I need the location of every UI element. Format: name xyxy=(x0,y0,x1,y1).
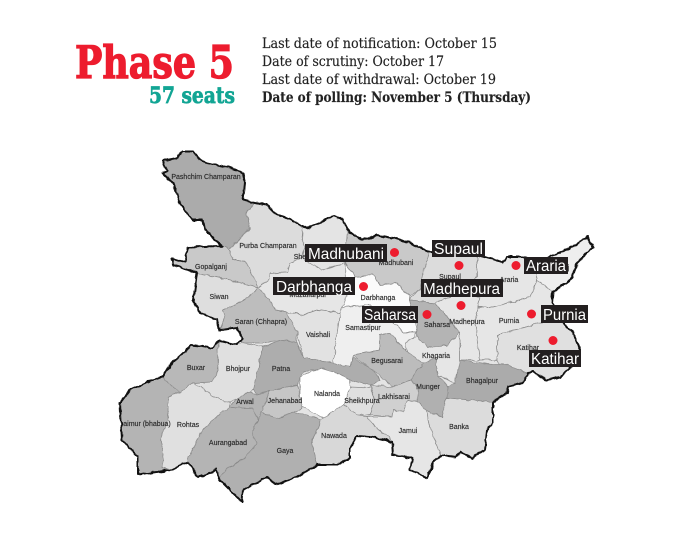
district: Gaya xyxy=(218,412,320,502)
district: Purnia xyxy=(475,280,560,360)
subtitle: 57 seats: 57 seats xyxy=(149,83,235,109)
district: Buxar xyxy=(163,341,220,392)
district: Jamui xyxy=(367,400,442,478)
text block: election schedule: Date of polling: November 5 (Thursday) xyxy=(262,90,531,106)
district: Gopalganj xyxy=(172,246,258,288)
text block: election schedule: Date of scrutiny: October 17 xyxy=(262,54,444,70)
district: Lakhisarai xyxy=(370,380,418,417)
district name labels: Nalanda xyxy=(314,391,340,398)
district name labels: Gaya xyxy=(277,448,293,455)
district name labels: Bhagalpur xyxy=(466,378,499,385)
district: Banka xyxy=(427,398,493,458)
marker: Supaul: Supaul xyxy=(434,241,483,258)
district: Munger xyxy=(410,358,448,417)
map outline: state border xyxy=(120,152,593,502)
district: Rohtas xyxy=(160,383,230,470)
district name labels: Purba Champaran xyxy=(239,243,297,250)
district name labels: Madhubani xyxy=(379,260,414,267)
district name labels: Darbhanga xyxy=(361,295,395,302)
district: Patna xyxy=(253,340,380,395)
district name labels: Aurangabad xyxy=(209,440,247,447)
district name labels: aimur (bhabua) xyxy=(123,421,171,428)
district: Araria xyxy=(460,255,537,307)
marker: Araria xyxy=(512,257,568,275)
marker: Purnia xyxy=(527,305,588,324)
district name labels: Jamui xyxy=(399,428,418,435)
district name labels: Madhepura xyxy=(449,319,485,326)
district: Nalanda xyxy=(300,368,350,418)
district name labels: Munger xyxy=(416,384,441,391)
district name labels: Saharsa xyxy=(424,322,450,329)
district: Khagaria xyxy=(405,333,460,383)
district: Jehanabad xyxy=(260,385,302,418)
marker: Katihar xyxy=(529,336,581,368)
district: Nawada xyxy=(312,405,392,465)
district: Katihar xyxy=(497,317,580,380)
district: Aurangabad xyxy=(188,407,258,478)
district: Saharsa xyxy=(410,300,460,347)
district: Madhepura xyxy=(435,293,480,360)
district name labels: Lakhisarai xyxy=(378,394,410,401)
district name labels: Khagaria xyxy=(422,353,450,360)
marker: Supaul xyxy=(432,240,485,270)
district name labels: Katihar xyxy=(517,345,540,352)
marker: Darbhanga: Darbhanga xyxy=(276,279,352,296)
marker: Purnia: Purnia xyxy=(543,307,586,324)
district: Vaishali xyxy=(287,310,340,365)
text block: election schedule: Last date of notification: October 15 xyxy=(262,36,497,52)
district name labels: Purnia xyxy=(499,318,519,325)
district: Sheikhpura xyxy=(343,387,375,415)
title: Phase 5: Phase 5 xyxy=(75,36,234,89)
marker: Katihar: Katihar xyxy=(531,351,580,368)
district: Madhubani xyxy=(345,232,430,297)
district name labels: Arwal xyxy=(236,399,254,406)
district name labels: Nawada xyxy=(321,433,347,440)
district: Saran xyxy=(220,288,297,343)
district name labels: Patna xyxy=(272,366,290,373)
district name labels: Araria xyxy=(500,277,518,284)
text block: election schedule xyxy=(262,36,531,106)
district name labels: Muzaffarpur xyxy=(289,292,327,299)
district: Sheohar and Sitamarhi xyxy=(302,216,348,270)
district name labels: Pashchim Champaran xyxy=(171,174,241,181)
district name labels: Buxar xyxy=(187,365,206,372)
district name labels: Jehanabad xyxy=(268,398,302,405)
district name labels: Gopalganj xyxy=(195,264,227,271)
marker: Saharsa: Saharsa xyxy=(364,307,416,324)
district name labels: Begusarai xyxy=(371,358,403,365)
district name labels: Supaul xyxy=(439,274,461,281)
district: Pashchim Champaran xyxy=(162,152,255,248)
marker: Madhubani: Madhubani xyxy=(308,246,384,263)
district name labels: Banka xyxy=(449,424,469,431)
district: Begusarai xyxy=(353,333,423,387)
marker: Madhepura: Madhepura xyxy=(423,281,500,298)
marker: Madhepura xyxy=(421,279,503,310)
base land fill xyxy=(120,152,593,502)
district: Kishanganj xyxy=(537,237,593,292)
district: Darbhanga xyxy=(342,263,417,332)
district name labels: Rohtas xyxy=(177,422,200,429)
marker: Araria: Araria xyxy=(526,258,566,275)
district: Arwal xyxy=(230,390,270,420)
district name labels: Siwan xyxy=(209,294,229,301)
district: Purba Champaran xyxy=(228,203,305,288)
district name labels xyxy=(123,174,570,455)
district: Bhojpur xyxy=(193,341,263,403)
district name labels: Bhojpur xyxy=(226,366,251,373)
district: Kaimur xyxy=(120,377,180,475)
district name labels: Saran (Chhapra) xyxy=(235,319,287,326)
district name labels: Sheohar xyxy=(294,254,321,261)
district name labels: Sheikhpura xyxy=(344,398,380,405)
district name labels: Vaishali xyxy=(306,332,330,339)
district: Samastipur xyxy=(333,305,417,367)
map: Bihar districts xyxy=(120,152,593,502)
district: Siwan xyxy=(193,273,258,330)
district: Muzaffarpur xyxy=(258,258,355,315)
text block: election schedule: Last date of withdrawal: October 19 xyxy=(262,72,496,88)
district name labels: Samastipur xyxy=(345,325,381,332)
district: Bhagalpur xyxy=(447,360,528,402)
district name labels: Kishanganj xyxy=(535,265,570,272)
district: Supaul xyxy=(410,252,477,303)
